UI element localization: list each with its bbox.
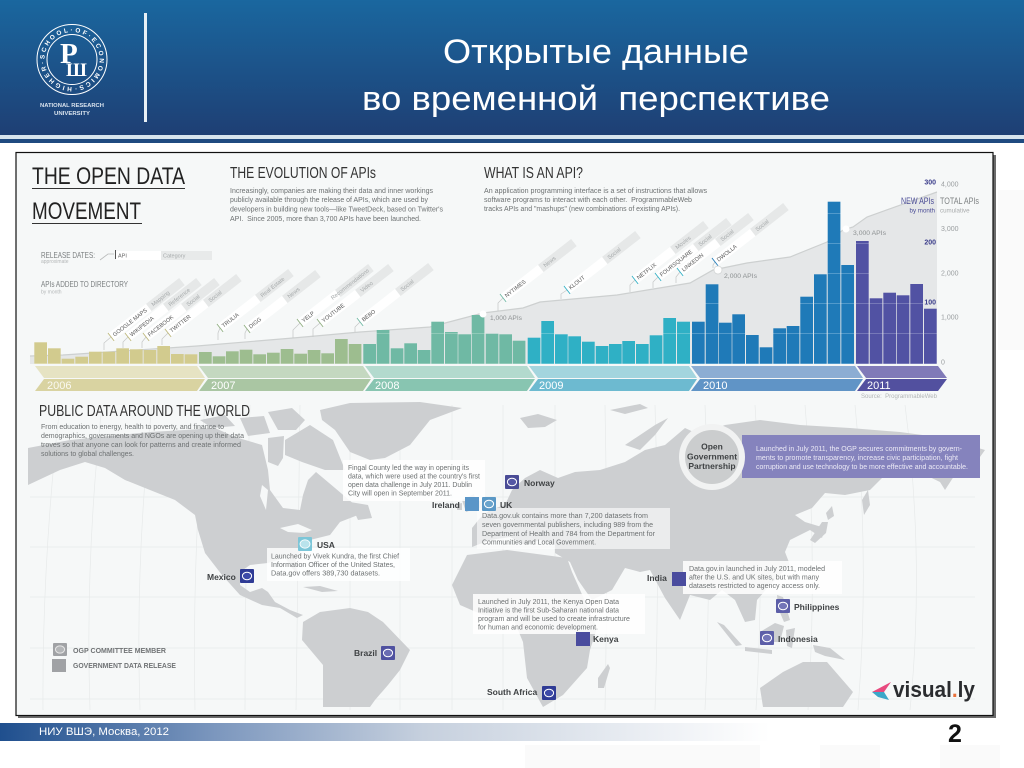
chart milestones: 1,000 APIs [490,315,523,322]
marker: Kenya [576,632,619,646]
label: LinkedIn: LINKEDIN [681,253,705,273]
arrow: 2006: 2006 [47,380,71,392]
callout: UK text: Data.gov.uk contains more than 7,200 datasets from [482,513,648,520]
label: Facebook: FACEBOOK [147,314,175,338]
label: Foursquare [655,218,732,281]
label: Bebo: Social [400,279,415,293]
callout: Ireland text: open data challenge in July 2011. Dublin [348,482,472,489]
text block: the evolution of APIs [230,165,443,223]
axis labels: cumulative [940,208,970,214]
label: Foursquare: Social [698,234,713,248]
callout: Open Government Partnership: ments to promote transparency, increase civic participation, fight [756,455,958,462]
arrow: 2008 [365,366,535,392]
axis labels: by month [910,208,936,214]
label: Google Maps: GOOGLE MAPS [112,308,149,338]
label: Netflix [632,221,709,284]
text block: public data around the world: troves so that anyone can look for patterns and create informed [41,442,241,449]
arrow: 2006 [35,366,205,392]
text block: what is an API: tracks APIs and "mashups" (new combinations of existing APIs). [484,206,680,213]
marker: Norway [505,475,555,489]
callout: Kenya text: Launched in July 2011, the Kenya Open Data [478,599,619,606]
legend: release dates [41,250,212,265]
marker: South Africa: South Africa [487,687,537,697]
callout: Open Government Partnership: Open [701,442,723,452]
marker: Ireland: Ireland [432,500,460,510]
axis labels: 300 [924,180,936,186]
title: Открытые данные [443,33,749,71]
label: Google Maps [108,278,185,341]
header banner [0,0,1024,143]
label: Google Maps: Mapping [151,290,171,308]
label: Bebo [357,263,434,326]
label: Dwolla: DWOLLA [716,244,739,263]
label: Twitter: TWITTER [169,314,192,334]
marker: Norway: Norway [524,478,555,488]
marker: Brazil: Brazil [354,648,377,658]
callout: Open Government Partnership: corruption and use technology to be more effective and accountable. [756,464,968,471]
label: Wikipedia [125,278,202,341]
marker: Brazil [354,646,395,660]
chart milestones: 3,000 APIs [853,230,887,237]
marker: UK: UK [500,500,513,510]
arrow: 2011 [857,366,947,392]
panel: infographic [16,152,996,718]
text block: public data around the world: PUBLIC DATA AROUND THE WORLD [39,403,250,420]
text block: public data around the world: From education to energy, health to poverty, and finance to [41,424,224,431]
icon: HSE logo: Ш [66,60,87,81]
label: Wikipedia: Reference [168,288,192,308]
callout: Open Government Partnership [679,424,980,490]
label: NYTimes [500,239,577,302]
text block: the evolution of APIs: THE EVOLUTION OF APIs [230,165,376,182]
axis labels: 100 [924,300,936,306]
map: world [28,402,985,710]
text block: what is an API: software programs to interact with each other. ProgrammableWeb [484,197,692,204]
label: Klout: KLOUT [568,275,587,291]
label: Yelp: Recommendations [330,268,371,302]
marker: UK [482,497,513,511]
callout: USA text: Launched by Vivek Kundra, the first Chief [271,554,399,560]
label: Foursquare: FOURSQUARE [659,249,694,278]
logo: visual.ly: visual.ly [893,677,976,702]
label: Dwolla: Social [755,219,770,233]
label: Yelp [297,264,374,327]
arrow: 2007 [199,366,371,392]
callout: Open Government Partnership: Partnership [688,461,736,471]
label: Digg: News [287,287,302,300]
label: NYTimes: News [543,256,558,269]
label: Facebook [143,278,220,341]
marker: Kenya: Kenya [593,634,619,644]
marker: Mexico: Mexico [207,572,236,582]
label: Trulia: Real Estate [260,277,286,299]
footer bar: НИУ ВШЭ, Москва, 2012 [39,726,169,738]
legend: APIs added to directory: APIs ADDED TO DIRECTORY [41,279,128,289]
map legend [52,643,176,672]
icon: HSE logo: HIGHER·SCHOOL·OF·ECONOMICS· [40,28,104,92]
text block: public data around the world [39,403,250,458]
legend: APIs added to directory [41,279,128,296]
callout: UK text: Department of Health and 784 from the Department for [482,531,656,538]
label: Wikipedia: WIKIPEDIA [129,316,156,338]
bar chart: new APIs by month [34,202,937,364]
marker: Indonesia: Indonesia [778,634,818,644]
label: Klout: Social [607,247,622,261]
text block: the evolution of APIs: publicly available through the release of APIs, which are used by [230,197,428,204]
text block: what is an API: An application programming interface is a set of instructions that allows [484,188,707,195]
text block: what is an API: WHAT IS AN API? [484,165,583,182]
callout: Kenya text: for human and economic development. [478,624,598,632]
legend: APIs added to directory: by month [41,290,62,296]
arrow: 2008: 2008 [375,380,399,392]
label: Twitter: Social [208,290,223,304]
text block: the evolution of APIs: developers in building new tools—like TweetDeck, based on Twitter's [230,206,443,214]
callout: UK text [477,508,670,549]
axis labels: 2,000 [941,270,959,278]
label: YouTube [317,264,394,327]
icon: HSE logo: UNIVERSITY [54,111,90,117]
marker: Mexico [207,569,254,583]
label: Trulia: TRULIA [221,312,241,329]
callout: UK text: seven governmental publishers, including 989 from the [482,522,653,529]
arrow: 2011: 2011 [867,380,891,392]
label: LinkedIn: Social [720,229,735,243]
title: во временной перспективе [362,80,830,118]
release labels [104,203,789,350]
callout: USA text: Information Officer of the United States, [271,562,395,569]
callout: Ireland text: Fingal County led the way in opening its [348,465,469,472]
callout: Kenya text [473,594,645,634]
label: YouTube: Video [360,281,375,294]
map legend: GOVERNMENT DATA RELEASE [73,661,176,670]
legend: release dates: API [118,254,127,260]
icon: HSE logo: Р [60,38,78,70]
label: Klout [564,231,641,294]
marker: Ireland [432,497,479,511]
label: Bebo: BEBO [361,309,378,323]
callout: Ireland text: data, which were used at the country's first [348,474,480,480]
marker: Philippines [776,599,840,613]
arrow: 2010: 2010 [703,380,727,392]
axis labels: 3,000 [941,226,959,233]
label: Trulia [217,269,294,332]
label: Digg: DIGG [248,317,263,330]
arrow: 2009 [529,366,697,392]
chart milestones [480,226,887,322]
label: LinkedIn [677,213,754,276]
heading: the open data movement [32,163,185,225]
callout: Ireland text [343,460,485,501]
arrow: 2009: 2009 [539,380,563,392]
title [362,33,830,118]
callout: Kenya text: program and will be used to create infrastructure [478,616,630,623]
text block: public data around the world: solutions to global challenges. [41,451,134,458]
label: Netflix: Movies [675,235,693,251]
label: Digg [244,270,321,333]
icon: HSE logo: NATIONAL RESEARCH [40,103,104,109]
chart milestones: 2,000 APIs [724,273,758,280]
callout: India text [683,561,842,594]
callout: India text: after the U.S. and UK sites, but with many [689,574,819,582]
axis labels: 0 [941,360,945,366]
legend: release dates: Category [163,254,186,260]
chart: total APIs cumulative area [30,192,937,364]
icon: HSE logo [36,24,108,117]
axis labels: TOTAL APIs [940,196,979,206]
label: Netflix: NETFLIX [636,262,658,281]
axis labels: 4,000 [941,182,959,188]
legend: release dates: RELEASE DATES: [41,250,95,260]
arrow: 2010 [691,366,863,392]
label: YouTube: YOUTUBE [321,303,346,324]
label: Yelp: YELP [301,311,316,324]
axis labels: NEW APIs [901,196,934,206]
axis labels [901,180,979,366]
footer bar [0,723,770,741]
legend: release dates: approximate [41,259,69,265]
marker: India [647,572,686,586]
heading: the open data movement: THE OPEN DATA [32,163,185,190]
marker: India: India [647,573,667,583]
arrow: 2007: 2007 [211,380,235,392]
callout: Open Government Partnership: Launched in July 2011, the OGP secures commitments by govern- [756,446,963,453]
callout: Open Government Partnership: Government [687,452,737,462]
marker: Indonesia [760,631,818,645]
timeline arrows [35,366,947,392]
callout: India text: datasets restricted to agency access only. [689,583,820,590]
callout: USA text [267,548,410,581]
label: Facebook: Social [186,294,201,308]
callout: UK text: Communities and Local Government. [482,540,596,546]
heading: the open data movement: MOVEMENT [32,198,141,225]
text block: the evolution of APIs: API. Since 2005, more than 3,700 APIs have been launched. [230,216,421,223]
axis labels: 1,000 [941,314,959,322]
label: Twitter [165,274,242,337]
marker: USA: USA [317,540,335,550]
map legend: OGP COMMITTEE MEMBER [73,646,167,655]
callout: Kenya text: Initiative is the first Sub-Saharan national data [478,608,619,614]
label: NYTimes: NYTIMES [504,279,528,299]
callout: India text: Data.gov.in launched in July 2011, modeled [689,566,825,573]
axis labels: 200 [924,240,936,246]
marker: Philippines: Philippines [794,602,840,612]
label: Dwolla [712,203,789,266]
source note: Source: ProgrammableWeb [861,394,938,400]
text block: the evolution of APIs: Increasingly, companies are making their data and inner workings [230,188,433,195]
marker: South Africa [487,686,556,700]
callout: USA text: Data.gov offers 389,730 datasets. [271,570,380,578]
text block: public data around the world: demographics, governments and NGOs are opening up their data [41,433,244,440]
slide number: 2 [948,720,962,748]
marker: USA [298,537,335,551]
callout: Ireland text: City will open in September 2011. [348,490,452,498]
text block: what is an API [484,165,707,213]
